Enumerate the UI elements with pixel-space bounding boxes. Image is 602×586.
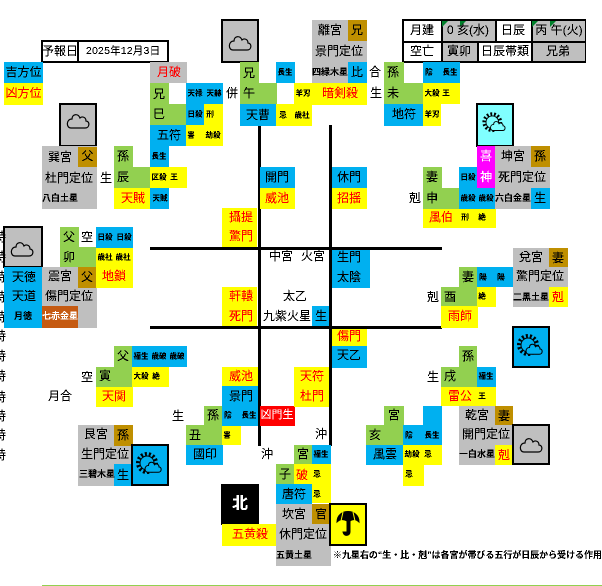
branch block: 酉: 陽 xyxy=(497,272,505,282)
branch block: 申 xyxy=(409,167,496,228)
door: 天符 杜門 xyxy=(294,367,329,407)
palace: east 震宮 xyxy=(42,267,97,328)
date panel: 2025年12月3日 xyxy=(86,44,160,57)
branch block: 未: 長生 xyxy=(442,66,458,76)
palace: west 兌宮: 二黒土星 xyxy=(513,291,549,302)
branch block: 寅: 父 xyxy=(117,349,129,363)
east virtues: 天徳 天道 月徳: 天道 xyxy=(12,289,36,303)
door: 威池 景門: 威池 xyxy=(229,369,253,383)
center palace text: 九紫火星 xyxy=(263,309,311,323)
branch block: 寅: 寅 xyxy=(99,369,111,383)
center palace text: 生 xyxy=(315,309,327,323)
branch block: 辰: 辰 xyxy=(117,170,129,184)
door: 威池 景門: 長生 xyxy=(242,410,257,420)
branch block: 寅: 絶 xyxy=(152,370,160,380)
branch block: 丑 xyxy=(172,406,241,465)
weather icon: cloud, southeast xyxy=(60,104,96,146)
door: 軒轅 死門 xyxy=(222,287,257,326)
branch block: 未: 大殺 xyxy=(424,88,440,98)
branch block: 酉: 酉 xyxy=(444,290,456,304)
branch block: 巳: 日殺 xyxy=(188,108,203,118)
branch block: 丑: 孫 xyxy=(207,408,219,422)
palace: northwest 乾宮: 乾宮 xyxy=(465,407,489,422)
branch block: 卯: 父 xyxy=(63,230,75,244)
branch block: 卯: 歳社 xyxy=(116,252,131,262)
lucky and unlucky direction legend: 吉方位 xyxy=(5,64,42,79)
branch block: 申: 歳殺 xyxy=(460,192,476,202)
door: 休門 招揺: 休門 xyxy=(337,170,361,184)
door: 休門 招揺: 招揺 xyxy=(337,191,361,205)
palace: south 離宮: 兄 xyxy=(351,23,363,37)
north marker: 北 xyxy=(232,494,248,512)
palace: west 兌宮 xyxy=(513,248,568,307)
branch block: 子: 子 xyxy=(279,467,291,481)
branch block: 巳: 天禄 xyxy=(188,88,203,98)
branch block: 卯: 日殺 xyxy=(116,232,132,242)
branch block: 戌: 戌 xyxy=(444,369,456,383)
branch block: 巳: 刑 xyxy=(206,110,214,118)
weather icon: sun behind cloud, west xyxy=(513,327,549,367)
relation label: 併: 併 xyxy=(226,86,238,100)
branch block: 子: 福生 xyxy=(314,448,329,458)
palace: north 坎宮: 官 xyxy=(315,507,327,521)
palace: northwest 乾宮: 一白水星 xyxy=(459,448,495,459)
branch block: 亥 xyxy=(366,406,442,486)
palace: southeast 巽宮: 父 xyxy=(81,149,94,163)
branch block: 辰: 生 xyxy=(100,171,112,185)
palace: northeast 艮宮: 生 xyxy=(117,468,129,482)
branch block: 卯: 日殺 xyxy=(98,232,113,242)
branch block: 子 xyxy=(276,445,331,505)
branch block: 戌: 王 xyxy=(478,392,486,400)
branch block: 戌: 福生 xyxy=(478,370,494,380)
weather icon: cloud, northwest xyxy=(513,425,549,464)
branch block: 辰: 区殺 xyxy=(152,172,167,182)
branch block: 午 xyxy=(240,62,367,126)
palace: southwest 坤宮: 死門定位 xyxy=(498,170,546,184)
branch block: 午: 暗剣殺 xyxy=(322,85,358,100)
branch block: 寅: 歳破 xyxy=(170,350,185,360)
branch block: 亥: 劫殺 xyxy=(404,448,420,458)
branch block: 寅: 大殺 xyxy=(134,370,149,380)
label: 五黄殺: 五黄殺 xyxy=(232,526,268,541)
palace: northwest 乾宮: 妻 xyxy=(498,409,510,423)
palace: north 坎宮 xyxy=(276,504,331,566)
branch block: 未: 羊刃 xyxy=(424,108,440,118)
branch block: 卯 xyxy=(60,227,133,288)
door: 生門 太陰: 太陰 xyxy=(337,269,361,284)
palace: north 坎宮: 休門定位 xyxy=(279,527,327,541)
branch block: 未 xyxy=(384,62,460,126)
center cross grid lines xyxy=(150,125,442,446)
branch block: 卯: 歳社 xyxy=(98,252,113,262)
branch block: 未: 孫 xyxy=(387,65,399,79)
branch block: 未: 陰 xyxy=(425,66,433,76)
branch block: 亥: 陰 xyxy=(405,430,413,440)
header table: month, day and void: 兄弟 xyxy=(546,44,570,58)
branch block: 午: 天曹 xyxy=(246,108,270,122)
branch block: 戌: 雷公 xyxy=(448,389,472,403)
branch block: 午: 忌 xyxy=(279,110,287,120)
palace: northeast 艮宮: 孫 xyxy=(117,428,129,442)
palace: northeast 艮宮: 三碧木星 xyxy=(79,468,115,479)
header table: month, day and void: 月建 xyxy=(410,23,434,37)
door: 傷門 天乙: 傷門 xyxy=(337,328,361,343)
door: 生門 太陰: 生門 xyxy=(337,250,361,264)
palace: east 震宮: 震宮 xyxy=(48,268,72,283)
date panel: 予報日 xyxy=(42,44,78,58)
label: 五黄殺 xyxy=(222,524,276,546)
label: 月合: 月合 xyxy=(48,389,72,403)
palace: northeast 艮宮 xyxy=(78,425,133,486)
branch block: 戌 xyxy=(427,346,496,406)
branch block: 戌: 孫 xyxy=(462,349,474,363)
footnote: ※九星右の“生・比・剋”は各宮が帯びる五行が日辰から受ける作用 xyxy=(333,549,602,560)
branch block: 午: 午 xyxy=(243,86,255,100)
branch block: 子: 忌 xyxy=(313,470,321,478)
branch block: 酉: 陽 xyxy=(479,272,487,282)
palace: southwest 坤宮: 生 xyxy=(534,191,546,205)
branch block: 亥: 忌 xyxy=(424,450,432,458)
door: 傷門 天乙 xyxy=(332,328,367,368)
branch block: 亥: 亥 xyxy=(369,428,381,442)
branch block: 辰: 天賊 xyxy=(152,194,168,202)
east door: 開門 威池 xyxy=(260,167,295,209)
branch block: 丑: 國印 xyxy=(193,447,217,461)
east door: 開門 威池: 開門 xyxy=(265,170,289,184)
branch block: 酉: 妻 xyxy=(462,270,474,284)
header table: month, day and void: 丙 午(火) xyxy=(535,23,583,37)
branch block: 子: 忌 xyxy=(313,490,321,498)
branch block: 辰: 孫 xyxy=(117,149,129,163)
header table: month, day and void: 空亡 xyxy=(410,44,434,58)
relation labels: 沖: 沖 xyxy=(261,447,273,461)
header table: month, day and void: 日辰帯類 xyxy=(481,44,529,58)
branch block: 午: 羊刃 xyxy=(296,88,310,98)
branch block: 卯: 空 xyxy=(81,230,93,244)
branch block: 午: 長生 xyxy=(278,66,293,76)
branch block: 巳: 天赫 xyxy=(206,88,222,98)
branch block: 寅: 福生 xyxy=(134,350,149,360)
relation labels: 沖 xyxy=(261,427,327,461)
north marker xyxy=(221,484,259,525)
branch block: 酉: 剋 xyxy=(427,290,439,304)
branch block: 巳: 五符 xyxy=(157,127,181,142)
palace: southwest 坤宮: 坤宮 xyxy=(501,148,525,163)
header table: month, day and void: 0 亥(水) xyxy=(447,23,489,37)
palace: south 離宮: 比 xyxy=(351,65,363,79)
palace: east 震宮: 七赤金星 xyxy=(42,310,78,321)
palace: southwest 坤宮: 孫 xyxy=(534,149,546,163)
palace: southeast 巽宮 xyxy=(42,146,97,209)
date panel xyxy=(42,41,168,62)
header table: month, day and void: 寅卯 xyxy=(447,44,471,58)
center palace text: 中宮 xyxy=(269,248,293,263)
branch block: 午: 歳社 xyxy=(294,110,310,120)
door: 軒轅 死門: 軒轅 xyxy=(229,289,253,303)
branch block: 申: 日殺 xyxy=(460,172,476,182)
branch block: 申: 歳殺 xyxy=(478,192,494,202)
lucky and unlucky direction legend xyxy=(4,62,43,105)
branch block: 申: 申 xyxy=(426,191,438,205)
branch block: 午: 兄 xyxy=(243,66,255,80)
relation labels: 合 生: 合 xyxy=(369,65,381,79)
branch block: 丑: 生 xyxy=(172,409,184,423)
branch block: 子: 破 xyxy=(296,467,308,482)
palace: west 兌宮: 妻 xyxy=(552,251,564,265)
door: 軒轅 死門: 死門 xyxy=(229,309,253,323)
door: 生門 太陰 xyxy=(332,250,370,288)
east virtues: 天徳 天道 月徳: 月徳 xyxy=(14,310,32,321)
left column: 時 labels xyxy=(0,230,6,462)
center palace text xyxy=(263,248,329,326)
lucky and unlucky direction legend: 凶方位 xyxy=(5,85,42,100)
branch block: 酉: 雨師 xyxy=(448,309,472,323)
branch block: 寅 xyxy=(81,346,187,407)
relation labels: 沖: 沖 xyxy=(315,427,327,441)
badge: 喜神 xyxy=(477,146,495,188)
branch block: 申: 妻 xyxy=(426,170,438,184)
branch block: 丑: 害 xyxy=(223,430,231,440)
branch block: 申: 刑 xyxy=(461,212,469,222)
palace: northwest 乾宮: 開門定位 xyxy=(462,427,510,441)
branch block: 亥: 長生 xyxy=(424,430,440,440)
east door: 開門 威池: 威池 xyxy=(265,191,289,205)
palace: northeast 艮宮: 生門定位 xyxy=(81,447,129,461)
palace: south 離宮 xyxy=(312,20,367,83)
palace: southeast 巽宮: 杜門定位 xyxy=(45,170,93,185)
badge: 喜神: 喜 xyxy=(480,149,492,163)
branch block: 巳: 月破 xyxy=(157,64,181,79)
center palace text: 太乙 xyxy=(283,288,307,303)
branch block: 申: 風伯 xyxy=(429,209,453,224)
door: 威池 景門: 陰 xyxy=(224,410,232,420)
branch block: 丑: 丑 xyxy=(189,428,201,442)
branch block: 寅: 空 xyxy=(81,370,93,384)
branch block: 未: 地符 xyxy=(392,106,416,121)
door: 天符 杜門: 天符 xyxy=(300,368,324,383)
door: 威池 景門 xyxy=(222,367,258,426)
branch block: 巳: 巳 xyxy=(153,107,165,121)
door: 威池 景門: 景門 xyxy=(229,389,253,403)
palace: north 坎宮: 五黄土星 xyxy=(276,549,312,560)
branch block: 亥: 宮 xyxy=(388,407,400,422)
palace: northwest 乾宮 xyxy=(459,406,513,465)
east virtues: 天徳 天道 月徳 xyxy=(4,267,42,328)
palace: south 離宮: 離宮 xyxy=(318,22,342,37)
palace: east 震宮: 傷門定位 xyxy=(45,288,93,303)
branch block: 巳: 兄 xyxy=(153,87,165,101)
branch block: 辰: 長生 xyxy=(152,150,167,160)
palace: west 兌宮: 剋 xyxy=(552,290,564,304)
center palace text: 火宮 xyxy=(301,248,325,263)
branch block: 亥: 風雲 xyxy=(373,447,397,461)
weather icon: sun behind cloud, northeast xyxy=(132,445,168,485)
branch block: 卯: 地鎖 xyxy=(102,269,126,283)
branch block: 巳: 劫殺 xyxy=(206,130,221,140)
branch block: 巳 xyxy=(150,62,223,146)
weather icon: umbrella xyxy=(330,504,366,545)
east virtues: 天徳 天道 月徳: 天徳 xyxy=(12,269,36,284)
palace: south 離宮: 四緑木星 xyxy=(312,66,348,77)
relation labels: 合 生: 生 xyxy=(370,86,382,100)
branch block: 辰 xyxy=(100,146,187,209)
branch block: 辰: 王 xyxy=(170,172,178,182)
branch block: 子: 唐符 xyxy=(282,486,306,501)
branch block: 寅: 天関 xyxy=(102,389,126,403)
weather icon: cloud, east xyxy=(4,227,42,267)
palace: west 兌宮: 兌宮 xyxy=(519,249,543,264)
door: 攝提 驚門: 驚門 xyxy=(229,228,253,243)
door: 天符 杜門: 杜門 xyxy=(300,388,324,403)
branch block: 子: 宮 xyxy=(297,446,309,461)
palace: southwest 坤宮: 六白金星 xyxy=(495,192,531,203)
branch block: 辰: 天賊 xyxy=(121,190,145,205)
weather icon: sun behind cloud, southwest xyxy=(477,104,513,146)
palace: northwest 乾宮: 剋 xyxy=(498,448,510,462)
branch block: 申: 剋 xyxy=(409,191,421,205)
branch block: 巳: 害 xyxy=(187,130,195,140)
badge: 凶門生 xyxy=(260,406,295,426)
branch block: 未: 未 xyxy=(387,86,399,100)
branch block: 亥: 忌 xyxy=(405,470,413,478)
weather icon: cloud, south xyxy=(222,20,258,62)
palace: southeast 巽宮: 巽宮 xyxy=(48,149,72,164)
palace: east 震宮: 父 xyxy=(81,270,93,284)
badge: 喜神: 神 xyxy=(480,169,492,184)
palace: southwest 坤宮 xyxy=(495,146,550,209)
palace: southeast 巽宮: 八白土星 xyxy=(42,192,78,203)
badge: 凶門生: 凶門生 xyxy=(260,407,294,421)
relation labels: 合 生 xyxy=(369,65,382,100)
bottom rule xyxy=(42,585,602,586)
palace: west 兌宮: 驚門定位 xyxy=(516,268,564,283)
branch block: 未: 王 xyxy=(442,88,450,98)
palace: north 坎宮: 坎宮 xyxy=(282,506,306,521)
branch block: 戌: 生 xyxy=(427,370,439,384)
header table: month, day and void: 日辰 xyxy=(501,23,525,37)
palace: south 離宮: 景門定位 xyxy=(315,44,363,58)
branch block: 申: 絶 xyxy=(478,212,486,222)
palace: northeast 艮宮: 艮宮 xyxy=(84,426,108,441)
branch block: 寅: 歳破 xyxy=(152,350,167,360)
door: 休門 招揺 xyxy=(332,167,367,209)
header table: month, day and void xyxy=(403,20,585,62)
branch block: 酉 xyxy=(427,267,513,328)
branch block: 酉: 絶 xyxy=(478,290,486,300)
door: 攝提 驚門: 攝提 xyxy=(229,209,253,224)
door: 傷門 天乙: 天乙 xyxy=(337,348,361,362)
door: 攝提 驚門 xyxy=(222,208,257,247)
branch block: 卯: 卯 xyxy=(63,250,75,264)
